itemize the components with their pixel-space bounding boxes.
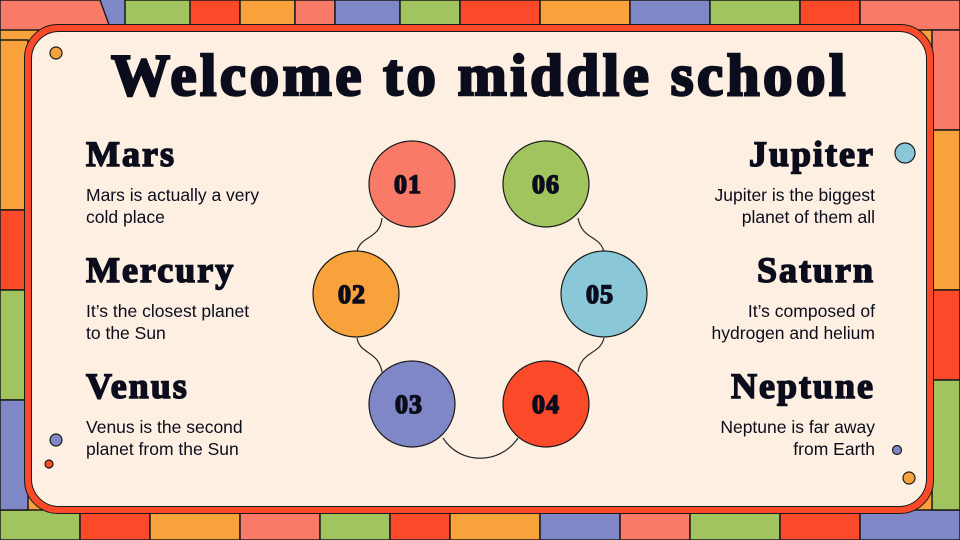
cycle diagram: 05 — [586, 280, 614, 309]
cycle diagram: 01 — [394, 170, 422, 199]
item: Neptune — [720, 366, 875, 459]
item: Venus: planet from the Sun — [86, 439, 239, 459]
item: Neptune: Neptune is far away — [720, 417, 875, 437]
item: Neptune: Neptune — [731, 366, 875, 406]
cycle diagram: 03 — [395, 390, 423, 419]
item: Saturn: hydrogen and helium — [712, 323, 875, 343]
item: Venus — [86, 366, 243, 459]
cycle diagram: 02 — [338, 280, 366, 309]
item: Neptune: from Earth — [793, 439, 875, 459]
item: Mars — [86, 134, 260, 227]
item: Mars: cold place — [86, 207, 165, 227]
item: Mercury — [86, 250, 249, 343]
item: Jupiter: Jupiter is the biggest — [714, 185, 875, 205]
item: Saturn — [712, 250, 875, 343]
item: Jupiter: planet of them all — [742, 207, 875, 227]
item: Mars: Mars — [86, 134, 176, 174]
cycle diagram: 04 — [532, 390, 560, 419]
item: Saturn: It’s composed of — [748, 301, 875, 321]
item: Jupiter: Jupiter — [749, 134, 875, 174]
item: Venus: Venus — [86, 366, 189, 406]
cycle diagram: 06 — [532, 170, 560, 199]
item: Jupiter — [714, 134, 875, 227]
item: Mercury: Mercury — [86, 250, 235, 290]
item: Mercury: It’s the closest planet — [86, 301, 249, 321]
item: Venus: Venus is the second — [86, 417, 243, 437]
item: Mars: Mars is actually a very — [86, 185, 259, 205]
item: Mercury: to the Sun — [86, 323, 166, 343]
item: Saturn: Saturn — [757, 250, 875, 290]
title: Welcome to middle school — [111, 42, 849, 108]
